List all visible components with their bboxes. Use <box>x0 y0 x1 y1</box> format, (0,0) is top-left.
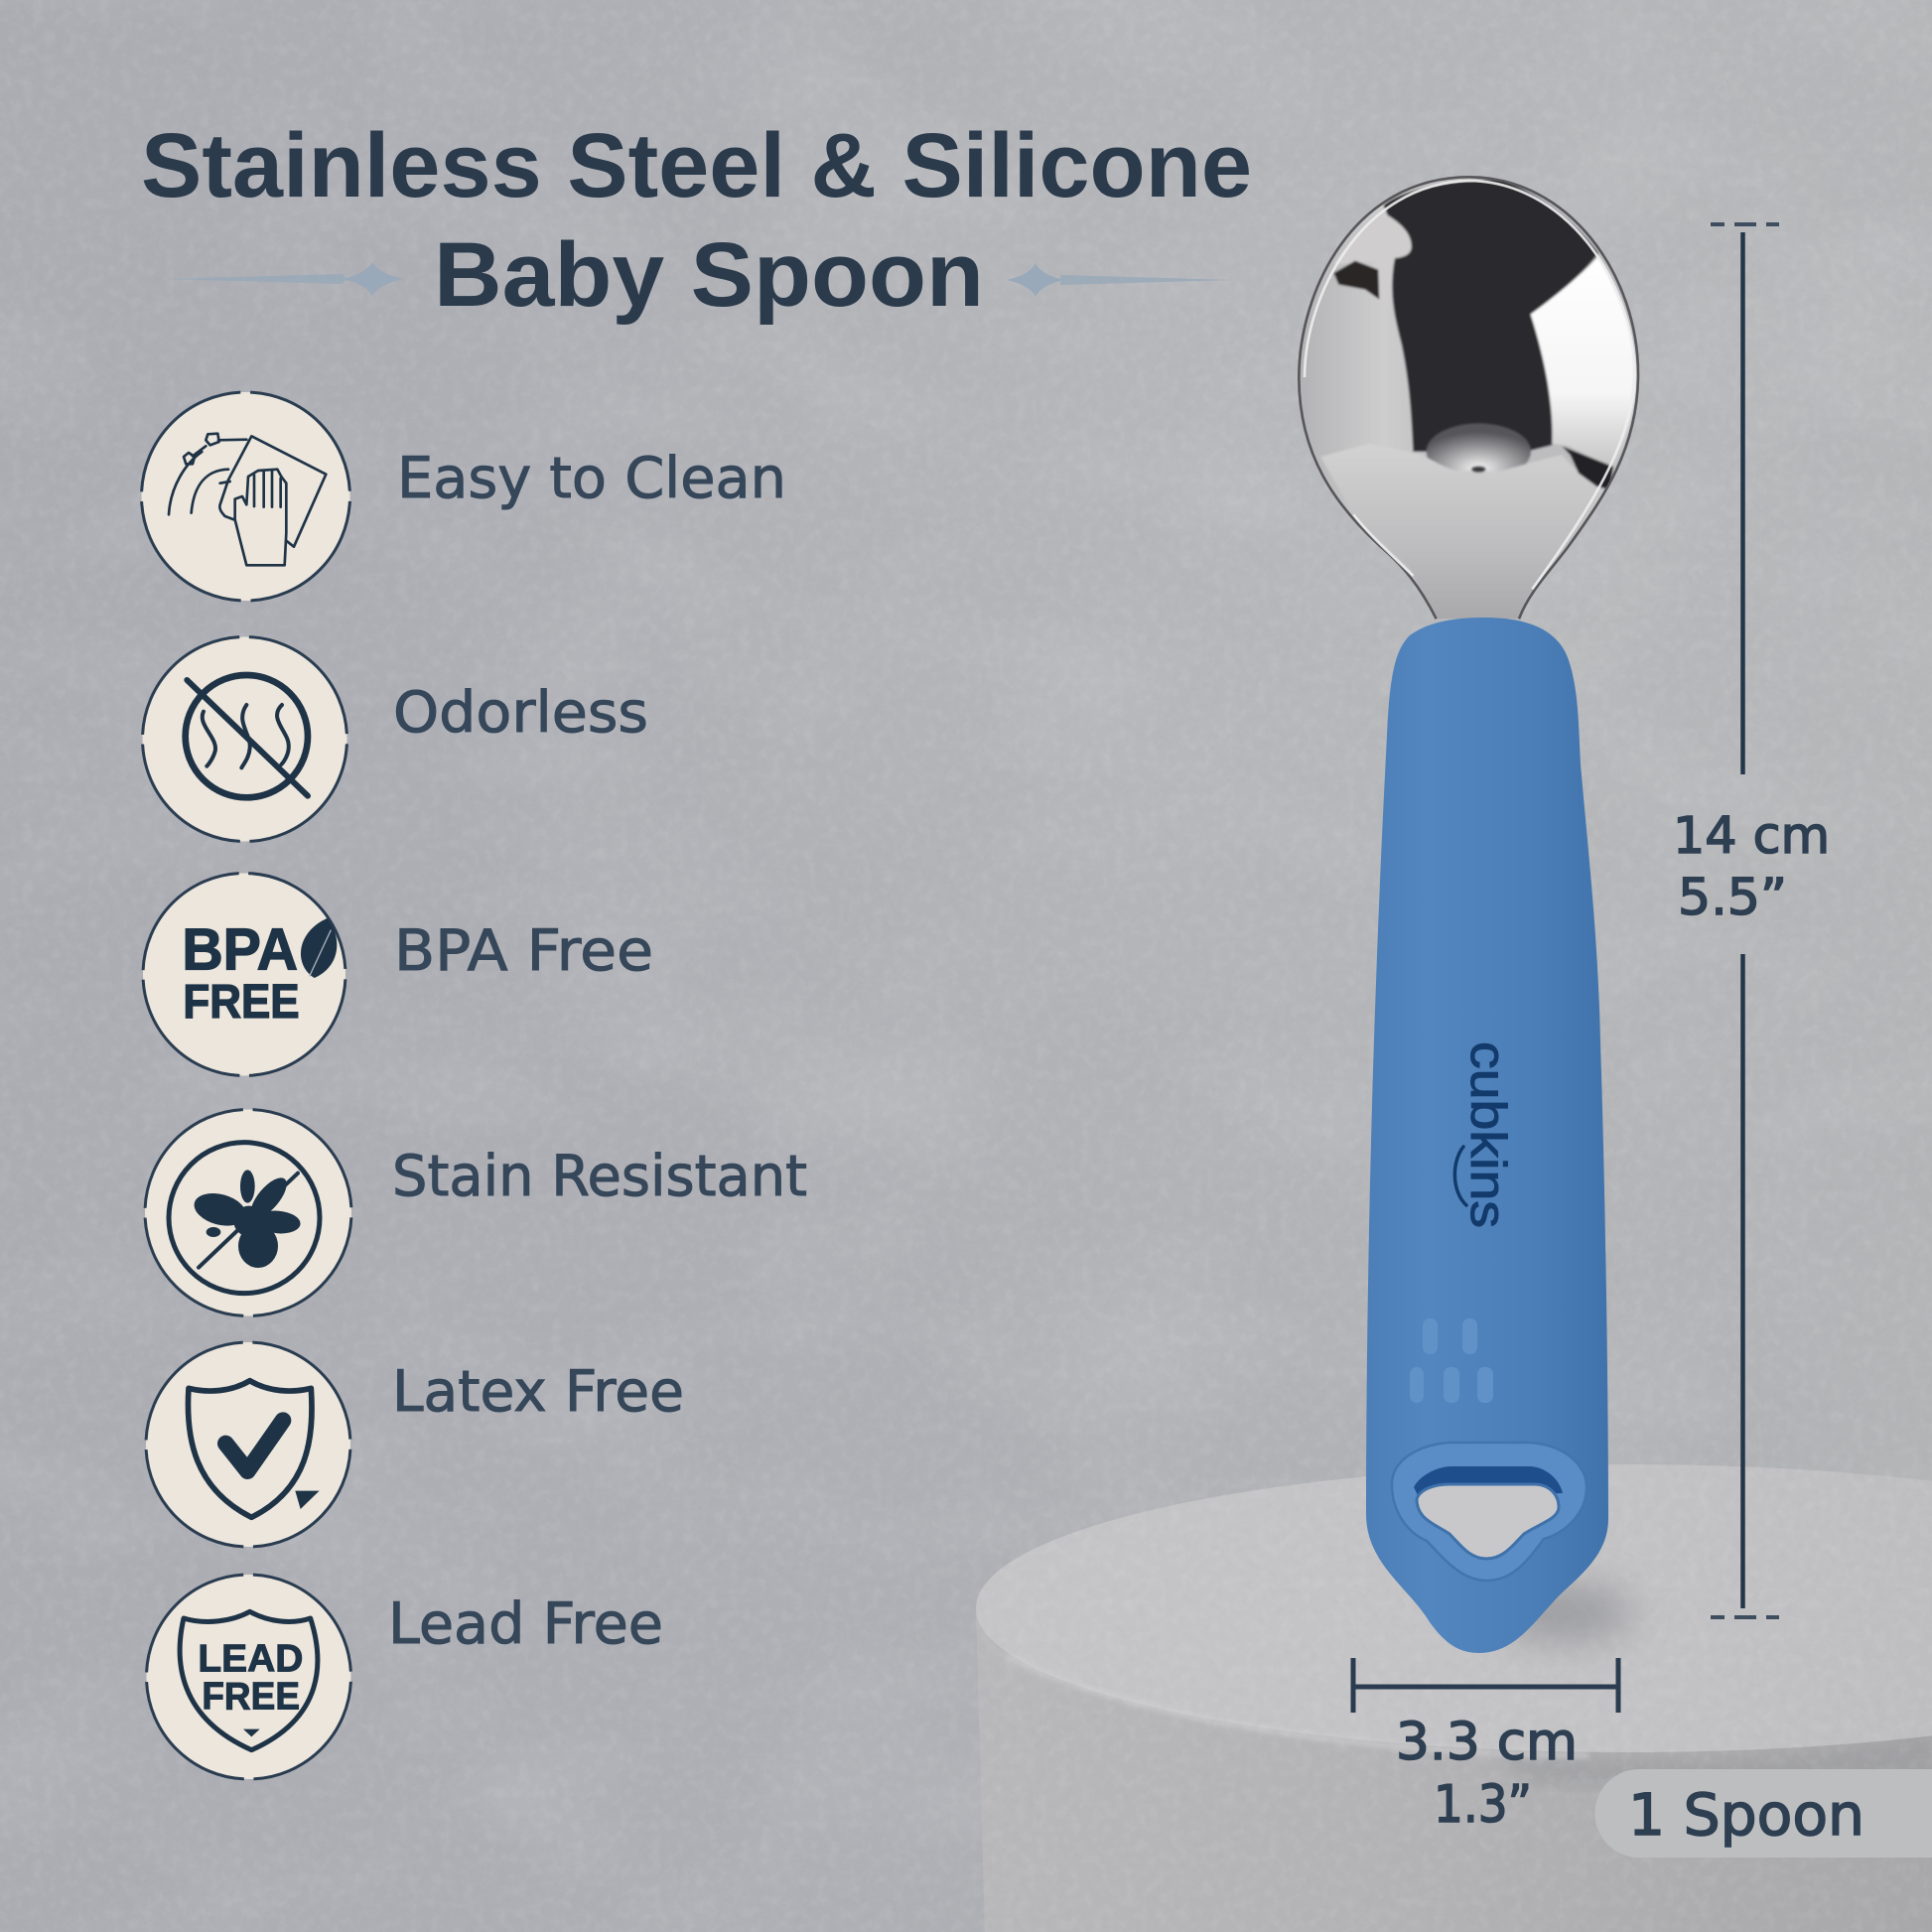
hanging loop hole <box>1417 1484 1559 1559</box>
dark reflection <box>1383 180 1598 452</box>
dark patch left <box>1333 261 1379 300</box>
height label: 5.5” <box>1678 869 1787 927</box>
width label: 1.3” <box>1434 1775 1532 1835</box>
label: Stain Resistant: Stain Resistant <box>392 1144 807 1209</box>
icon: lead free shield: FREE <box>202 1675 300 1719</box>
title: Baby Spoon <box>434 224 984 326</box>
lower light area <box>1320 444 1608 622</box>
badge circle <box>141 392 349 601</box>
quantity pill <box>1594 1769 1932 1858</box>
icon: no stain splat <box>169 1143 320 1294</box>
height dimension <box>1673 224 1830 1617</box>
icon: bpa free leaf: BPA <box>182 916 298 983</box>
hanging loop ring <box>1392 1443 1587 1581</box>
badge circle <box>147 1575 351 1779</box>
icon: lead free shield: LEAD <box>198 1636 303 1680</box>
feature: odorless <box>143 637 347 842</box>
top left highlight <box>1334 214 1414 266</box>
height label <box>1673 807 1830 927</box>
badge circle <box>143 874 345 1076</box>
dark band right <box>1562 446 1613 489</box>
height label: 14 cm <box>1673 807 1830 866</box>
grip dots <box>1410 1318 1493 1403</box>
badge circle <box>146 1342 350 1547</box>
label: Odorless: Odorless <box>393 680 648 746</box>
title: Stainless Steel & Silicone <box>141 115 1252 216</box>
feature: easy to clean <box>141 392 349 601</box>
brand logo: cubkins <box>1460 1041 1516 1228</box>
feature: stain resistant <box>145 1110 351 1316</box>
spoon <box>1298 172 1641 1653</box>
icon: no odor <box>186 675 308 797</box>
spoon handle <box>1366 618 1608 1653</box>
centre ball <box>1427 424 1531 480</box>
icon: bpa free leaf <box>182 916 337 1029</box>
pedestal cylinder <box>976 1464 1932 1932</box>
title ornament right <box>1007 263 1235 297</box>
badge circle <box>143 637 347 842</box>
title <box>141 115 1252 326</box>
badge circle <box>145 1110 351 1316</box>
feature: lead free <box>147 1575 351 1779</box>
feature: latex free <box>146 1342 350 1547</box>
icon: lead free shield <box>180 1611 318 1750</box>
bright reflection right <box>1531 256 1636 469</box>
label: Easy to Clean: Easy to Clean <box>397 446 786 511</box>
icon: hand wiping with cloth <box>169 434 326 565</box>
quantity pill: 1 Spoon <box>1628 1781 1864 1849</box>
width label <box>1396 1713 1578 1835</box>
width label: 3.3 cm <box>1396 1713 1578 1772</box>
label: Latex Free: Latex Free <box>392 1359 684 1425</box>
hanging loop inner shadow <box>1414 1466 1563 1499</box>
spoon shadow on pedestal <box>1494 1586 1633 1641</box>
title ornament left <box>164 262 404 296</box>
icon: bpa free leaf: FREE <box>183 975 300 1029</box>
label: BPA Free: BPA Free <box>394 918 653 984</box>
feature: bpa free <box>143 874 345 1076</box>
label: Lead Free: Lead Free <box>388 1591 663 1657</box>
icon: shield with check <box>188 1381 320 1517</box>
width dimension <box>1353 1658 1618 1835</box>
spoon bowl <box>1298 172 1641 622</box>
